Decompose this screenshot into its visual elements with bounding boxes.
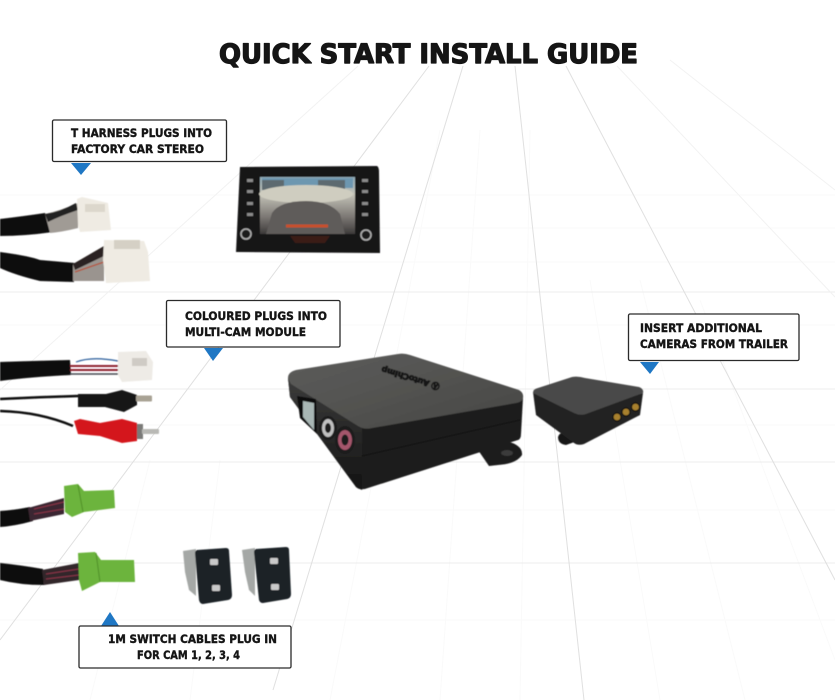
small trailer camera module <box>533 377 643 445</box>
title: QUICK START INSTALL GUIDE <box>219 39 638 70</box>
green switch connector 1 <box>0 484 115 527</box>
callout: T harness: FACTORY CAR STEREO <box>71 142 204 156</box>
black RCA plug <box>0 390 152 412</box>
callout: T harness: T HARNESS PLUGS INTO <box>71 126 212 140</box>
callout: additional cameras <box>628 314 799 374</box>
callout: coloured plugs: MULTI-CAM MODULE <box>185 325 306 339</box>
small mounting tab <box>558 428 580 445</box>
callout: switch cables: 1M SWITCH CABLES PLUG IN <box>108 632 277 646</box>
callout: T harness <box>52 120 226 175</box>
callout: switch cables <box>79 612 291 668</box>
mounting tab <box>478 441 522 466</box>
factory car stereo <box>236 166 380 253</box>
multi-cam module <box>288 354 523 490</box>
T harness connectors <box>0 197 150 283</box>
multi-cam module: Ⓐ AutoChimp <box>380 365 441 392</box>
callout: coloured plugs: COLOURED PLUGS INTO <box>185 309 327 323</box>
camera switch 1 <box>183 548 232 604</box>
red RCA plug <box>0 411 159 443</box>
coloured plug harness <box>0 351 153 382</box>
camera switch 2 <box>242 547 291 603</box>
callout: additional cameras: CAMERAS FROM TRAILER <box>640 337 788 351</box>
callout: switch cables: FOR CAM 1, 2, 3, 4 <box>137 648 240 662</box>
green switch connector 2 <box>0 552 135 591</box>
callout: coloured plugs <box>166 300 340 361</box>
callout: additional cameras: INSERT ADDITIONAL <box>640 321 763 335</box>
